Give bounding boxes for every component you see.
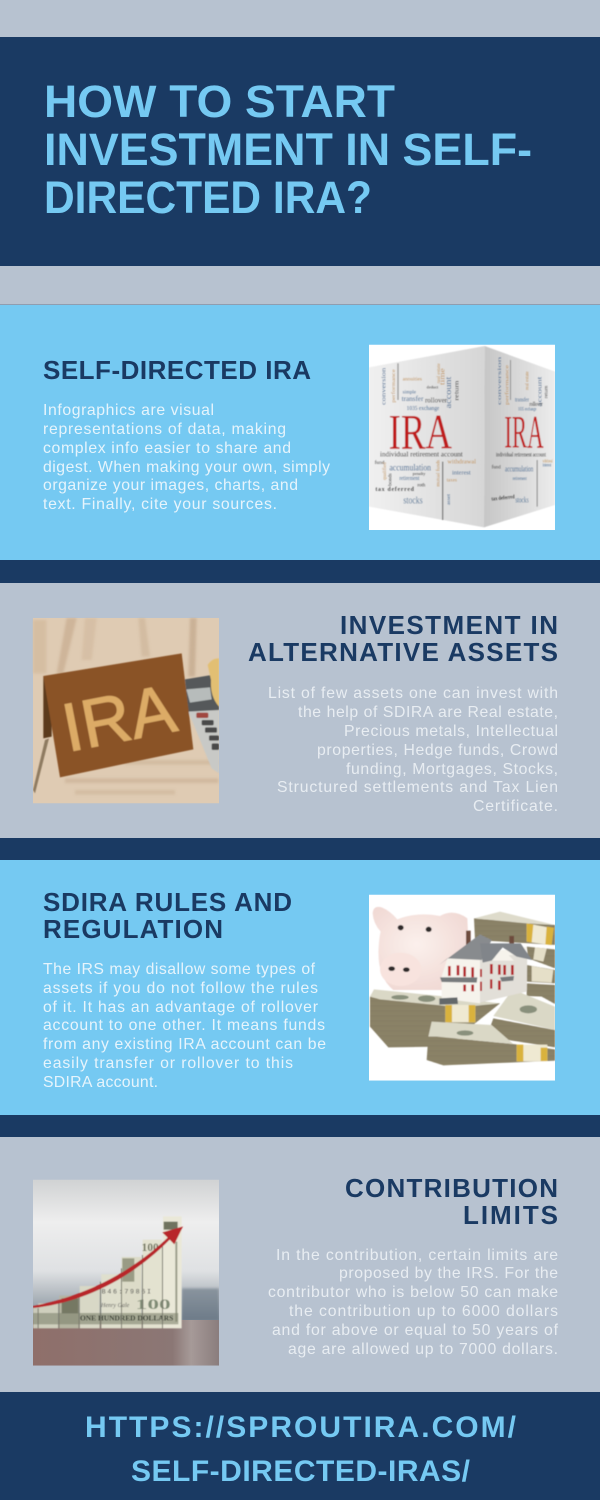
image: IRA word cube: roth [417, 484, 426, 489]
image: IRA word cube: account [537, 376, 544, 407]
image: IRA word cube: tax deferred [491, 494, 516, 503]
footer URL text: SELF-DIRECTED-IRAS/ [131, 1455, 471, 1488]
image: IRA word cube: asset [446, 494, 452, 505]
text block: rules description: easily transfer or rollover to this [43, 1055, 293, 1072]
image: IRA word cube: tax deferred [375, 487, 415, 493]
text block: infographics description: text. Finally, cite your sources. [43, 496, 277, 513]
image: IRA word cube: fund [492, 465, 501, 470]
text block: contribution description: the contribution up to 6000 dollars [289, 1303, 558, 1320]
image: dollar bill chart with red arrow [33, 1180, 219, 1366]
text block: contribution description: In the contribution, certain limits are [276, 1247, 558, 1264]
text block: list of assets: Certificate. [473, 798, 558, 815]
text block: infographics description: Infographics are visual [43, 402, 214, 419]
image: IRA word cube: stocks [515, 495, 529, 505]
title [44, 76, 532, 223]
text block: list of assets: the help of SDIRA are Real estate, [298, 704, 558, 721]
image: IRA word cube: individual retirement account [496, 452, 546, 459]
panel: title banner [0, 37, 600, 266]
image: IRA word cube: performance [390, 369, 397, 403]
image: IRA word cube: fund [375, 459, 385, 466]
text block: contribution description: age are allowed up to 7000 dollars. [288, 1341, 558, 1358]
title: INVESTMENT IN SELF- [44, 124, 532, 175]
panel: SDIRA rules and regulation [43, 887, 555, 1091]
image: IRA word cube: penalty [413, 471, 426, 476]
image: dollar bill chart with red arrow: ONE HUNDRED DOLLARS [80, 1314, 173, 1322]
image: IRA word cube: withdrawal [447, 458, 476, 465]
heading: contribution limits: LIMITS [463, 1200, 558, 1230]
text block: infographics description: digest. When making your own, simply [43, 459, 330, 476]
heading: investment in alternative assets: ALTERNATIVE ASSETS [248, 637, 558, 667]
text block: rules description: SDIRA account. [43, 1074, 158, 1091]
image: IRA word cube: conversion [497, 356, 503, 405]
image: IRA word cube: transfer [402, 394, 424, 403]
title: DIRECTED IRA? [44, 172, 372, 223]
image: IRA word cube: 1035 exchange [518, 408, 537, 413]
footer URL text [85, 1411, 517, 1488]
text block: list of assets: Structured settlements and Tax Lien [277, 779, 558, 796]
image: IRA word cube: account [444, 376, 453, 408]
image: dollar bill chart with red arrow: 100 [136, 1297, 171, 1313]
text block: list of assets: List of few assets one can invest with [268, 685, 558, 702]
image: IRA word cube: real estate [437, 362, 442, 383]
heading: investment in alternative assets [248, 610, 558, 667]
text block: rules description: of it. It has an advantage of rollover [43, 999, 318, 1016]
image: IRA word cube: return [543, 385, 549, 398]
image: IRA word cube: simple [403, 390, 417, 395]
image: IRA word cube: qualified [383, 462, 388, 480]
image: piggy bank, house and money stacks [369, 895, 555, 1081]
image: IRA word cube: bonds [388, 473, 394, 486]
text block: list of assets: funding, Mortgages, Stocks, [346, 761, 558, 778]
panel: contribution limits [33, 1173, 559, 1366]
image: IRA word cube: rollover [529, 402, 543, 408]
image: IRA card on wooden table: IRA [56, 670, 182, 767]
image: dollar bill chart with red arrow: Henry Gale [100, 1303, 130, 1309]
text block: infographics description: complex info easier to share and [43, 440, 291, 457]
heading: SDIRA rules and regulation: SDIRA RULES AND [43, 887, 292, 917]
heading: self-directed IRA: SELF-DIRECTED IRA [43, 355, 311, 385]
image: IRA word cube: stocks [403, 495, 423, 506]
panel: self-directed IRA [43, 345, 555, 530]
footer URL text: HTTPS://SPROUTIRA.COM/ [85, 1411, 517, 1444]
text block: infographics description: representations of data, making [43, 421, 286, 438]
image: IRA word cube: mutual funds [434, 460, 441, 487]
text block: rules description: from any existing IRA account can be [43, 1036, 326, 1053]
image: IRA word cube: interest [543, 464, 552, 469]
heading: investment in alternative assets: INVESTMENT IN [340, 610, 558, 640]
image: IRA word cube: interest [452, 470, 471, 476]
text block: infographics description [43, 402, 330, 513]
text block: list of assets: Precious metals, Intellectual [344, 723, 558, 740]
text block: contribution description: proposed by the IRS. For the [339, 1265, 558, 1282]
image: IRA word cube: taxes [447, 478, 457, 483]
image: IRA word cube: retirement [399, 476, 420, 482]
heading: contribution limits: CONTRIBUTION [345, 1173, 558, 1203]
image: dollar bill chart with red arrow: 100 [142, 1242, 159, 1254]
text block: rules description: account to one other. It means funds [43, 1017, 325, 1034]
heading: SDIRA rules and regulation [43, 887, 292, 944]
image: IRA word cube: deduct [427, 384, 439, 389]
text block: list of assets: properties, Hedge funds, Crowd [317, 742, 558, 759]
image: IRA word cube: time [439, 368, 447, 385]
image: dollar bill chart with red arrow: B46:7986I [102, 1288, 151, 1296]
image: IRA word cube: return [454, 380, 461, 401]
text block: contribution description: and for above or equal to 50 years of [272, 1322, 559, 1339]
title: HOW TO START [44, 76, 395, 127]
text block: rules description: The IRS may disallow some types of [43, 961, 316, 978]
image: IRA word cube: conversion [380, 367, 387, 405]
image: IRA word cube: rollover [425, 395, 447, 404]
text block: contribution description [268, 1247, 559, 1358]
image: IRA word cube: real estate [525, 371, 530, 390]
panel: footer link [0, 1392, 600, 1500]
image: IRA word cube: individual retirement account [380, 451, 463, 459]
text block: rules description: assets if you do not follow the rules [43, 980, 318, 997]
image: IRA word cube: accumulation [505, 464, 534, 474]
image: IRA word cube: 1035 exchange [407, 405, 439, 412]
image: IRA word cube: IRA [504, 406, 544, 458]
image: IRA word cube: performance [505, 365, 510, 405]
image: IRA word cube: transfer [515, 397, 530, 404]
heading: SDIRA rules and regulation: REGULATION [43, 914, 223, 944]
text block: infographics description: organize your images, charts, and [43, 477, 298, 494]
text block: contribution description: contributor who is below 50 can make [268, 1284, 558, 1301]
image: IRA word cube: annuities [403, 377, 422, 383]
panel: investment in alternative assets [33, 610, 558, 815]
image: IRA word cube [369, 345, 555, 530]
text block: list of assets [268, 685, 558, 815]
heading: contribution limits [345, 1173, 558, 1230]
text block: rules description [43, 961, 326, 1091]
image: IRA card on wooden table [33, 618, 219, 803]
image: IRA word cube: accumulation [389, 464, 431, 474]
image: IRA word cube: retirement [513, 477, 527, 482]
image: IRA word cube: IRA [389, 403, 452, 459]
image: IRA word cube: withdrawal [543, 460, 553, 465]
